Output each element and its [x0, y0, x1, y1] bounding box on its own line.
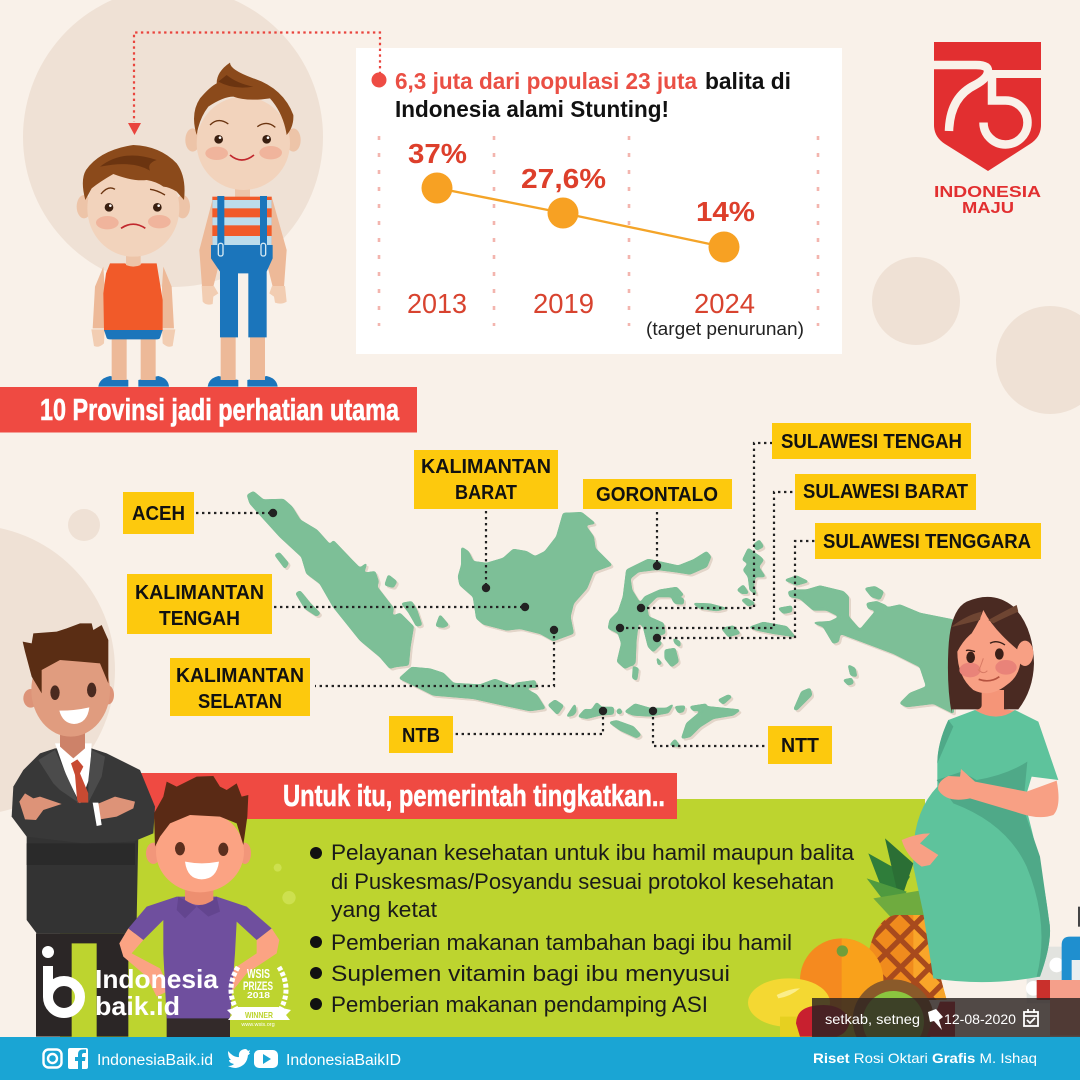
trend line chart: (target penurunan) [646, 319, 804, 339]
label: Sulawesi Tengah: SULAWESI TENGAH [781, 431, 962, 453]
label: Gorontalo: GORONTALO [596, 484, 718, 506]
text block: government action list: di Puskesmas/Posyandu sesuai protokol kesehatan [331, 869, 834, 894]
label: Kalimantan Tengah: TENGAH [159, 608, 240, 630]
icon: instagram [44, 1050, 62, 1068]
trend line chart: 2024 [694, 288, 755, 319]
heading banner: 10 provinces [0, 387, 417, 432]
map of Indonesia [247, 492, 953, 747]
background circles [0, 0, 1080, 815]
label: ACEH: ACEH [132, 503, 185, 525]
trend line chart: 37% [408, 138, 467, 169]
heading banner: government actions: Untuk itu, pemerintah tingkatkan.. [283, 778, 665, 813]
trend line chart: 2019 [533, 288, 594, 319]
footer bar [0, 1037, 1080, 1080]
illustration: pregnant woman [902, 597, 1080, 1036]
label: NTT: NTT [781, 735, 819, 757]
text block: government action list: Pemberian makanan pendamping ASI [331, 992, 708, 1017]
label: Sulawesi Tenggara [815, 523, 1041, 559]
neck [975, 690, 1015, 717]
trend line chart [379, 136, 818, 339]
panel: stunting statistics: Indonesia alami Stunting! [395, 96, 669, 122]
badge: WSIS Prizes 2018 winner: WINNER [245, 1010, 273, 1020]
text block: government action list [310, 840, 855, 1017]
text block: government action list: yang ketat [331, 897, 437, 922]
badge: WSIS Prizes 2018 winner: www.wsis.org [240, 1022, 275, 1028]
label: Sulawesi Barat: SULAWESI BARAT [803, 481, 968, 503]
label: Kalimantan Selatan [170, 658, 310, 716]
label: Gorontalo [583, 479, 732, 509]
illustration: smiling father in purple [119, 776, 296, 1037]
logo: Indonesia Maju 75 [934, 42, 1042, 217]
label: Kalimantan Barat [414, 450, 558, 509]
source and date strip [812, 998, 1080, 1038]
label: Sulawesi Tengah [772, 423, 971, 459]
map connector lines and dots [196, 443, 815, 746]
icon: calendar [1024, 1009, 1038, 1026]
illustration: healthy child [185, 63, 301, 387]
label: Kalimantan Selatan: KALIMANTAN [176, 665, 304, 687]
illustration: fruit and vitamins [748, 838, 1080, 1063]
icon: pin [928, 1009, 943, 1030]
headline: 6,3 juta dari populasi 23 juta [395, 68, 697, 94]
credits: Riset Rosi Oktari Grafis M. Ishaq [813, 1050, 1037, 1066]
label: Kalimantan Tengah: KALIMANTAN [135, 582, 264, 604]
label: Sulawesi Barat [795, 474, 976, 510]
label: Kalimantan Barat: BARAT [455, 482, 517, 504]
label: NTB: NTB [402, 725, 440, 747]
arrow: dotted pointer to stunted child [128, 32, 386, 135]
heading banner: government actions [135, 773, 677, 819]
footer bar: IndonesiaBaikID [286, 1052, 401, 1069]
logo: Indonesia Maju 75: INDONESIA [934, 184, 1042, 201]
illustration: smiling official [12, 623, 155, 1037]
illustration: stunted child [77, 145, 190, 387]
panel: stunting statistics: balita di [705, 68, 791, 94]
logo: Indonesia Maju 75: MAJU [962, 200, 1014, 217]
footer bar: IndonesiaBaik.id [97, 1052, 213, 1069]
label: NTB [389, 716, 453, 753]
hair highlight [952, 605, 1018, 627]
trend line chart: 2013 [407, 288, 467, 319]
face [957, 610, 1021, 693]
trend line chart: 14% [696, 196, 755, 227]
text block: government action list: Suplemen vitamin bagi ibu menyusui [331, 961, 730, 986]
label: Kalimantan Tengah [127, 574, 272, 634]
logo: Indonesia Baik: baik.id [95, 991, 180, 1021]
badge: WSIS Prizes 2018 winner: WSIS [247, 966, 270, 981]
label: NTT [768, 726, 832, 764]
label: ACEH [123, 492, 194, 534]
icon: facebook [68, 1048, 88, 1069]
badge: WSIS Prizes 2018 winner: PRIZES [243, 981, 273, 993]
panel: green action background [60, 799, 925, 1037]
hair back [948, 597, 1034, 713]
source and date strip: setkab, setneg [825, 1011, 920, 1027]
panel: stunting statistics [356, 48, 842, 354]
badge: WSIS Prizes 2018 winner [227, 966, 291, 1028]
badge: WSIS Prizes 2018 winner: 2018 [247, 990, 270, 1000]
heading banner: 10 provinces: 10 Provinsi jadi perhatian utama [40, 392, 400, 427]
ear [1017, 641, 1033, 666]
label: Kalimantan Barat: KALIMANTAN [421, 456, 551, 478]
logo: Indonesia Baik [42, 946, 219, 1021]
text block: government action list: Pemberian makanan tambahan bagi ibu hamil [331, 930, 792, 955]
logo: Indonesia Baik: Indonesia [95, 964, 219, 994]
label: Sulawesi Tenggara: SULAWESI TENGGARA [823, 531, 1031, 553]
source and date strip: 12-08-2020 [944, 1011, 1016, 1027]
trend line chart: 27,6% [521, 163, 606, 194]
label: Kalimantan Selatan: SELATAN [198, 691, 282, 713]
icon: twitter [228, 1049, 250, 1068]
text block: government action list: Pelayanan kesehatan untuk ibu hamil maupun balita [331, 840, 855, 865]
icon: youtube [254, 1050, 278, 1068]
dress lower and legs [1050, 980, 1080, 1036]
arm [938, 769, 1059, 817]
